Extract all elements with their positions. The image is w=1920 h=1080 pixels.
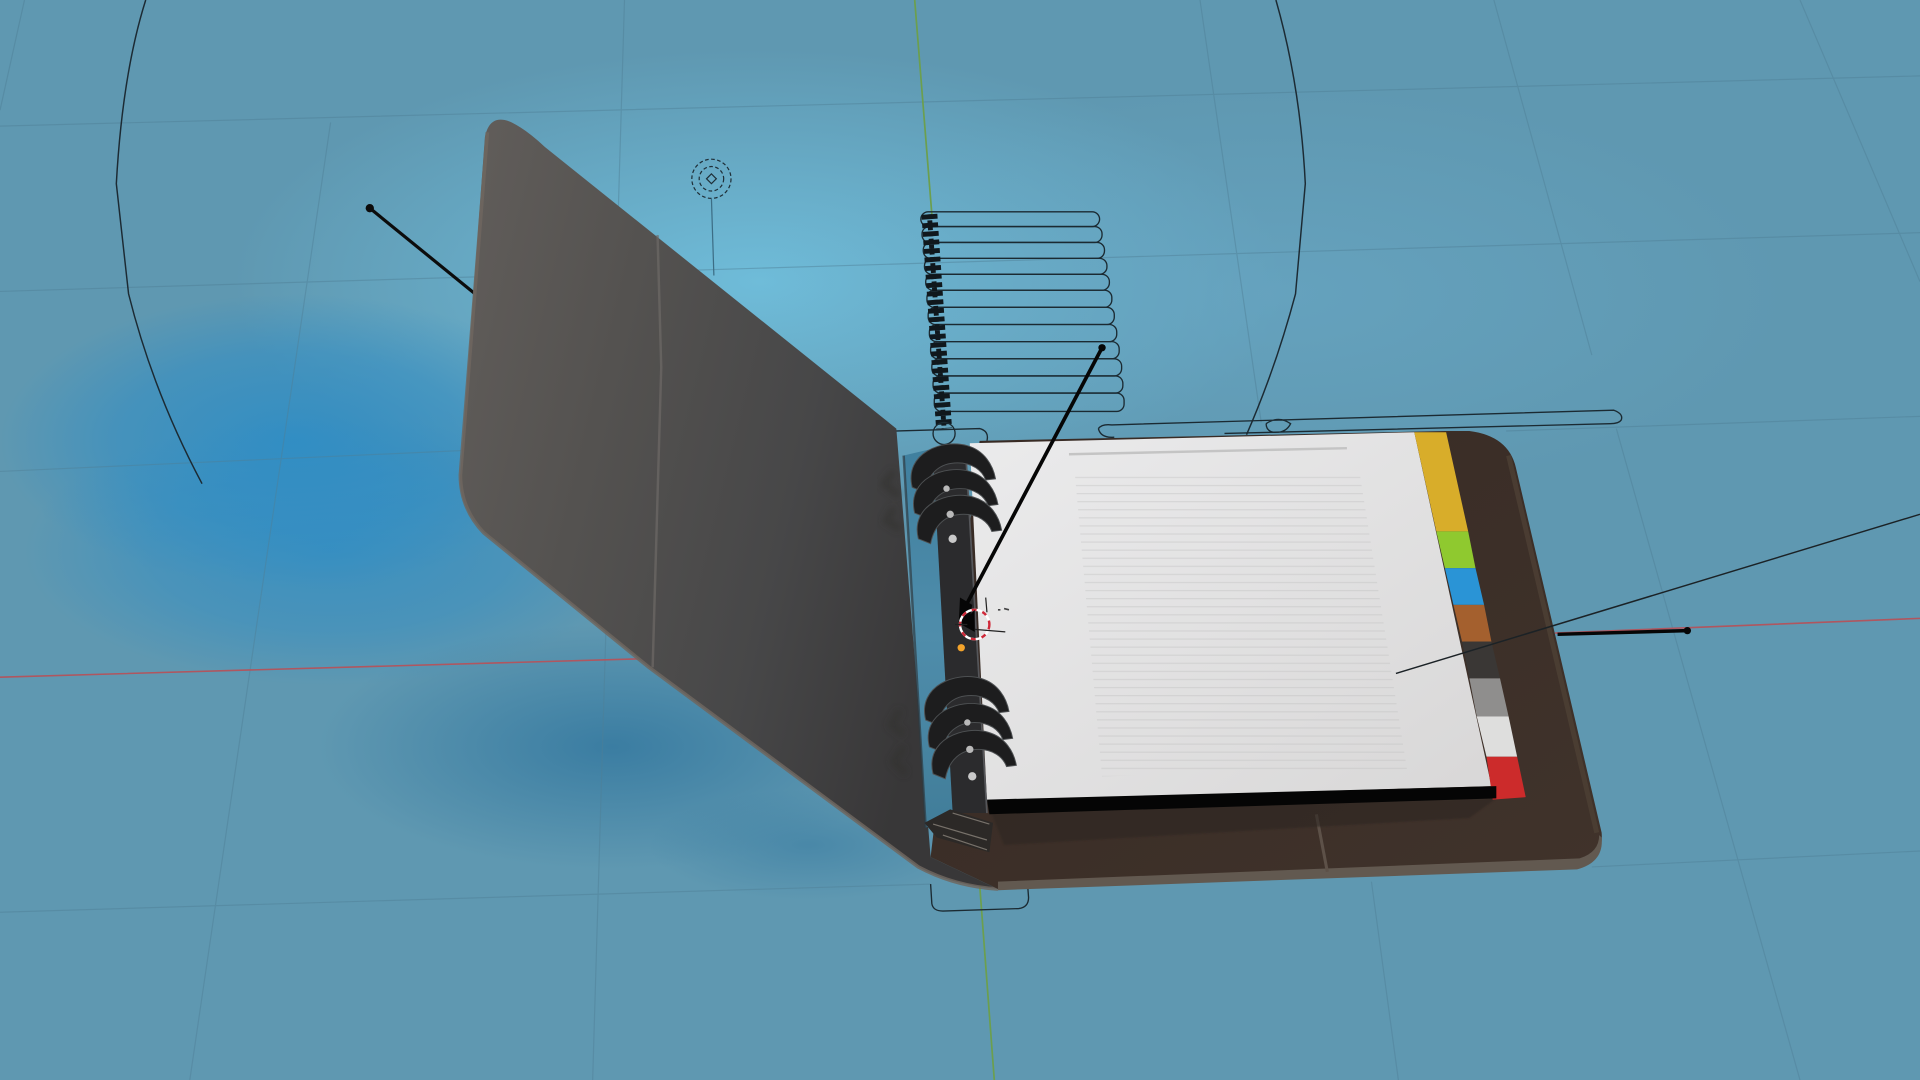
axis: green Y	[915, 0, 994, 1080]
binder rings: lower group	[925, 677, 1016, 780]
tab: white	[1477, 716, 1517, 757]
paper sheet with ruled lines	[970, 432, 1491, 801]
axis: red X	[0, 618, 1920, 677]
tab: red	[1487, 757, 1526, 800]
line: left handle	[366, 204, 475, 294]
ring mechanism bar	[933, 459, 987, 813]
tab: dark grey	[1462, 642, 1500, 678]
bottom outline loop	[931, 882, 1029, 911]
camera frustum arcs	[116, 0, 1305, 484]
binder rings: upper group	[911, 444, 1002, 544]
blue spine gap	[904, 446, 970, 828]
3D cursor	[955, 598, 1009, 639]
line: camera handle	[959, 344, 1106, 624]
binder back cover	[931, 431, 1602, 890]
black page edge	[987, 786, 1496, 814]
binder front cover, open	[460, 120, 998, 889]
light gizmo	[692, 159, 731, 276]
colored index tabs	[1414, 432, 1526, 800]
tab: yellow	[1414, 432, 1468, 531]
tab: blue	[1445, 568, 1484, 605]
stacked loop outlines behind binder	[894, 212, 1622, 444]
tab: grey	[1469, 678, 1509, 716]
origin dot	[958, 644, 965, 651]
line: right handle	[1558, 627, 1691, 634]
ring mechanism end cap	[924, 809, 993, 852]
tab: green	[1436, 531, 1476, 568]
line: right sightline	[1396, 514, 1920, 673]
tab: brown	[1453, 605, 1491, 642]
